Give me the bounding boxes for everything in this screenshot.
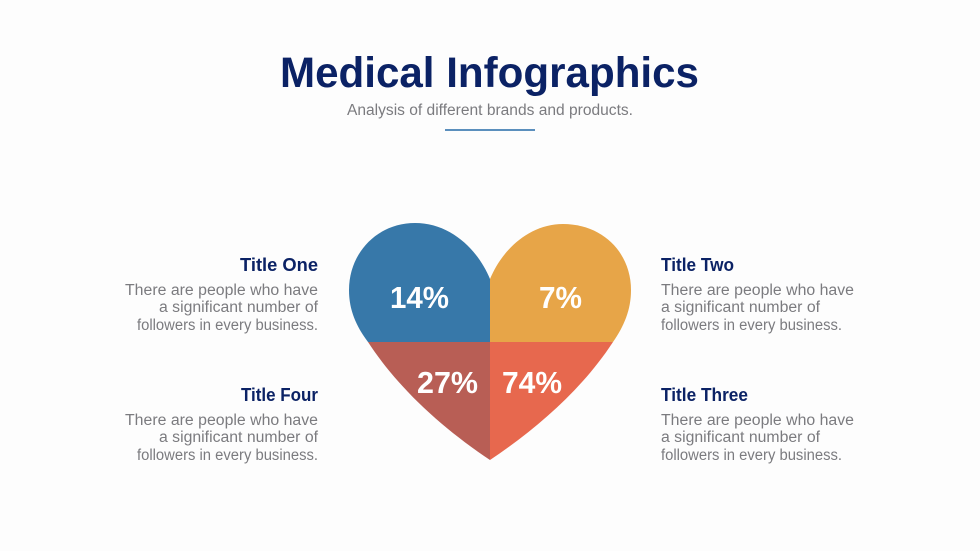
text block: Title Three: a significant number of [661,429,821,446]
text block: Title One: There are people who have [125,282,318,299]
value: 74%: 74% [502,365,562,400]
text block: Title Four: There are people who have [125,412,318,429]
segment: coral bottom right [490,342,613,460]
text block: Title Two: a significant number of [661,299,821,316]
text block: Title Two: followers in every business. [661,317,842,334]
subtitle: Analysis of different brands and products. [347,102,633,119]
title underline [445,129,535,131]
text block: Title Three [661,385,854,464]
text block: Title Four: followers in every business. [137,447,318,464]
text block: Title Four: Title Four [241,385,318,405]
text block: Title One: Title One [240,255,318,275]
value: 14%: 14% [390,280,449,315]
segment: blue top left [349,223,490,342]
text block: Title Three: followers in every business. [661,447,842,464]
text block: Title Three: There are people who have [661,412,854,429]
segment: orange top right [490,224,631,342]
text block: Title One [125,255,319,334]
heart chart [349,223,631,460]
value: 7%: 7% [539,280,582,315]
text block: Title One: a significant number of [159,299,319,316]
value: 27%: 27% [417,365,478,400]
text block: Title Two: Title Two [661,255,734,275]
text block: Title Two [661,255,854,334]
text block: Title Four: a significant number of [159,429,319,446]
text block: Title Four [125,385,319,464]
title: Medical Infographics [280,49,699,97]
segment: red bottom left [368,342,490,460]
text block: Title Three: Title Three [661,385,748,405]
text block: Title Two: There are people who have [661,282,854,299]
text block: Title One: followers in every business. [137,317,318,334]
